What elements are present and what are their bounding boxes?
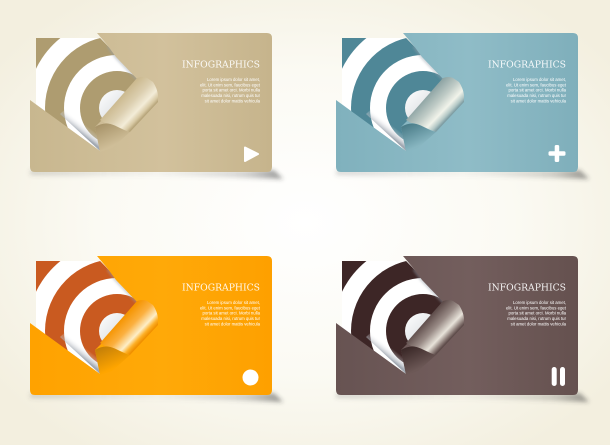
- body text: [200, 77, 261, 104]
- card shadow: [336, 170, 589, 179]
- title: INFOGRAPHICS: [488, 284, 566, 294]
- panel: brown card: [335, 256, 590, 405]
- page curl: [406, 300, 464, 355]
- card shadow: [336, 393, 589, 402]
- body text: sit amet dolor mattis vehicula: [205, 322, 261, 326]
- icon: pause: [552, 367, 565, 386]
- body text: malesuada nisi, rutrum quis tur: [201, 316, 261, 321]
- panel: tan card: [29, 33, 284, 182]
- title: INFOGRAPHICS: [488, 60, 566, 70]
- body text: porta sit amet orci. Morbi nulla: [202, 88, 261, 92]
- card body with torn corner: [30, 33, 272, 172]
- shadow under curl: [95, 124, 130, 152]
- body text: [506, 300, 567, 326]
- body text: [506, 77, 567, 104]
- body text: malesuada nisi, rutrum quis tur: [507, 93, 567, 98]
- peeled window with concentric rings: [342, 261, 442, 374]
- card body with torn corner: [336, 256, 578, 395]
- body text: elit. Ut enim sem, faucibus eget: [506, 82, 567, 88]
- shadow under curl: [401, 346, 436, 375]
- body text: Lorem ipsum dolor sit amet,: [207, 300, 260, 305]
- title: INFOGRAPHICS: [182, 60, 260, 70]
- body text: malesuada nisi, rutrum quis tur: [507, 316, 567, 321]
- body text: Lorem ipsum dolor sit amet,: [207, 77, 260, 82]
- shadow under curl: [95, 346, 130, 375]
- body text: [200, 300, 261, 326]
- shadow under curl: [401, 124, 436, 152]
- card body with torn corner: [336, 33, 578, 172]
- card shadow: [30, 393, 283, 402]
- body text: Lorem ipsum dolor sit amet,: [513, 77, 566, 82]
- panel: orange card: [29, 256, 284, 405]
- body text: malesuada nisi, rutrum quis tur: [201, 93, 261, 98]
- body text: porta sit amet orci. Morbi nulla: [202, 310, 261, 316]
- page curl: [406, 77, 464, 132]
- peeled window with concentric rings: [342, 38, 442, 151]
- page curl: [100, 300, 158, 355]
- body text: elit. Ut enim sem, faucibus eget: [200, 82, 261, 88]
- title: INFOGRAPHICS: [182, 284, 260, 294]
- body text: Lorem ipsum dolor sit amet,: [513, 300, 566, 305]
- body text: sit amet dolor mattis vehicula: [511, 322, 567, 326]
- icon: plus: [548, 145, 566, 162]
- body text: elit. Ut enim sem, faucibus eget: [200, 306, 261, 310]
- peeled window with concentric rings: [36, 38, 136, 151]
- body text: sit amet dolor mattis vehicula: [511, 98, 567, 104]
- body text: porta sit amet orci. Morbi nulla: [508, 88, 567, 92]
- icon: play: [245, 148, 258, 161]
- card body with torn corner: [30, 256, 272, 395]
- peeled window with concentric rings: [36, 261, 136, 374]
- panel: blue card: [335, 33, 590, 182]
- body text: porta sit amet orci. Morbi nulla: [508, 310, 567, 316]
- card shadow: [30, 170, 283, 179]
- body text: elit. Ut enim sem, faucibus eget: [506, 306, 567, 310]
- body text: sit amet dolor mattis vehicula: [205, 98, 261, 104]
- icon: record circle: [242, 370, 258, 386]
- page curl: [100, 77, 158, 132]
